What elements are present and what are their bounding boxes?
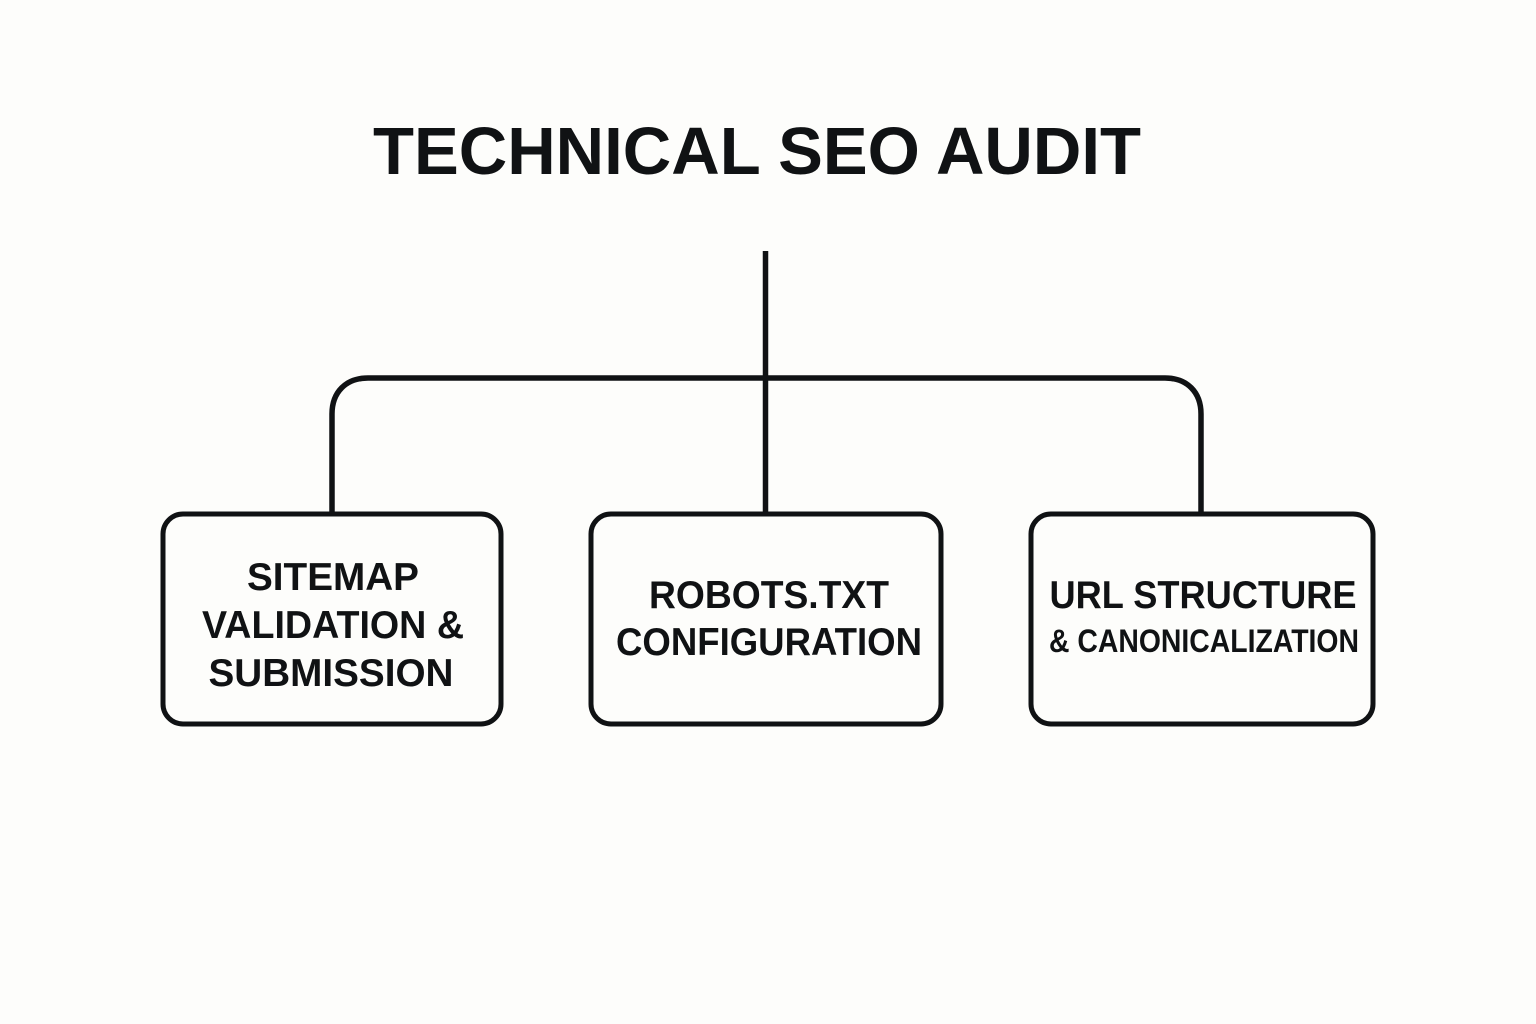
label: sitemap validation: SUBMISSION	[208, 652, 454, 695]
panel: sitemap validation	[163, 514, 501, 724]
connector: vertical trunk	[763, 251, 768, 514]
panel: robots.txt	[591, 514, 941, 724]
label: robots.txt configuration	[616, 574, 922, 664]
title: TECHNICAL SEO AUDIT	[373, 114, 1141, 189]
label: url structure and canonicalization	[1049, 574, 1359, 659]
label: robots.txt configuration: CONFIGURATION	[616, 621, 922, 664]
connector: horizontal branch	[332, 378, 1201, 514]
label: url structure and canonicalization: URL STRUCTURE	[1050, 574, 1356, 617]
label: sitemap validation: VALIDATION &	[202, 604, 464, 647]
panel: url structure	[1031, 514, 1373, 724]
label: robots.txt configuration: ROBOTS.TXT	[649, 574, 889, 617]
label: sitemap validation: SITEMAP	[247, 556, 419, 599]
label: sitemap validation	[202, 556, 464, 695]
label: url structure and canonicalization: & CANONICALIZATION	[1049, 623, 1359, 659]
